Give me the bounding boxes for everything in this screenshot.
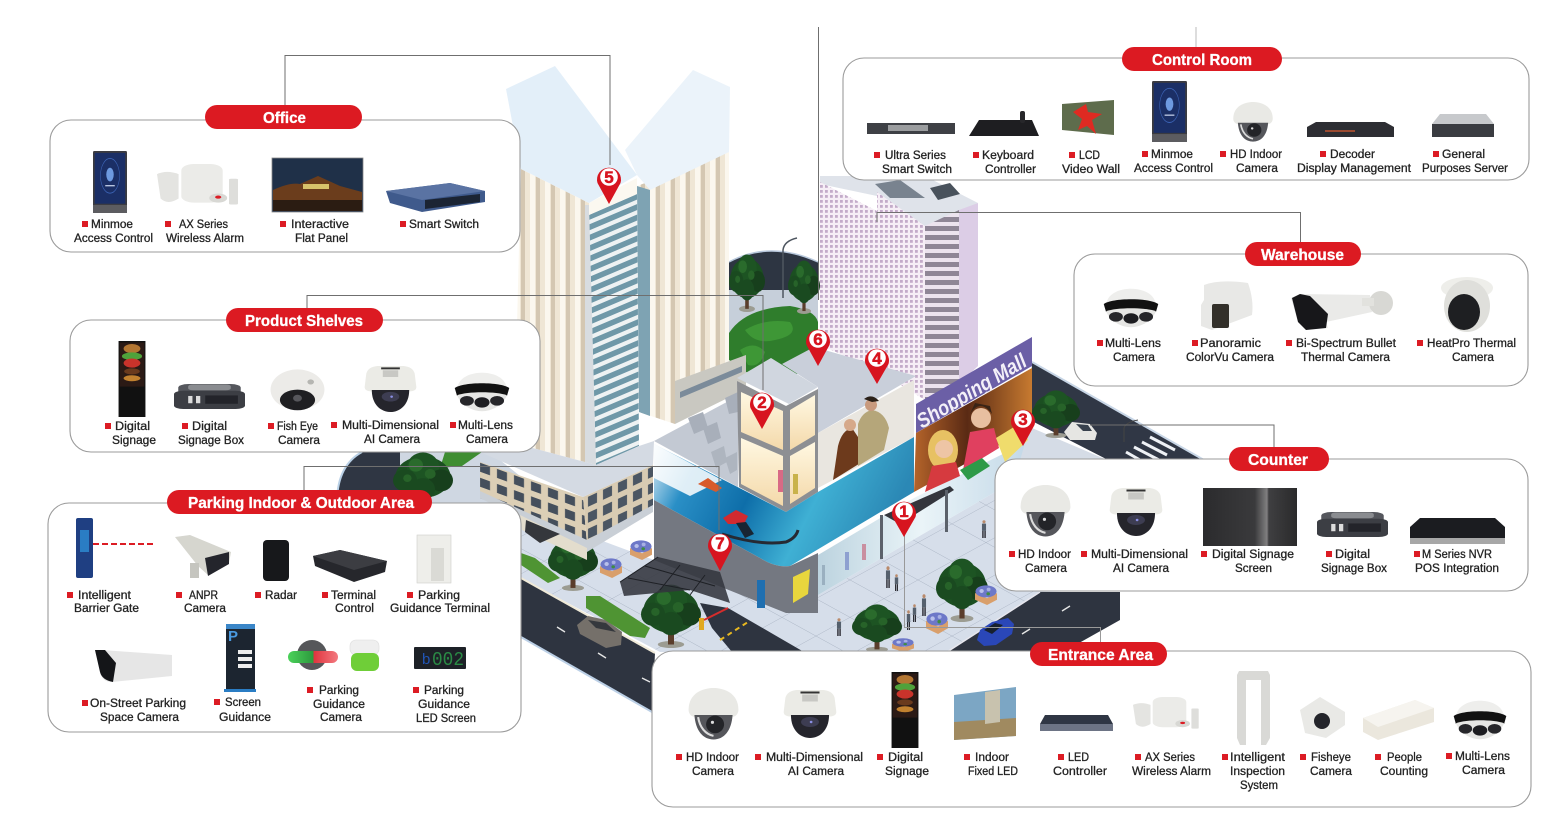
item: minmoe access control [1134,81,1213,175]
item: keyboard controller [969,111,1039,176]
item: parking guidance led screen: LED Screen [416,711,476,725]
item: fish eye camera: Fish Eye [277,419,318,433]
heading: warehouse: Warehouse [1261,247,1344,264]
item: m series nvr pos integration: M Series NVR [1422,547,1492,561]
item: fisheye camera [1300,697,1352,778]
panel: warehouse [1074,242,1528,386]
item: people counting [1363,700,1434,778]
item: fish eye camera: Camera [278,433,320,447]
item: radar [255,540,297,602]
couple billboard [818,380,914,488]
left road block behind panels [337,452,525,512]
item: heatpro thermal camera [1417,277,1516,364]
right road with crosswalk [1000,362,1206,462]
isometric mall scene [337,66,1206,712]
panel: office [50,105,520,252]
item: m series nvr pos integration [1410,518,1505,575]
item: screen guidance: Screen [225,695,261,709]
item: multi-lens camera [1097,289,1161,364]
item: multi-dimensional ai camera [1081,488,1188,575]
item: heatpro thermal camera: HeatPro Thermal [1427,336,1516,350]
item: multi-dimensional ai camera [331,366,439,446]
item: minmoe access control: Access Control [74,231,153,245]
item: smart switch [386,183,485,231]
item: panoramic colorvu camera [1186,281,1274,364]
item: anpr camera: Camera [184,601,226,615]
pin 1 [892,502,916,537]
wraparound LED screen with skier [654,437,914,566]
item: keyboard controller: Keyboard [982,148,1034,162]
mall lower roof with rooftop units [654,392,738,487]
item: parking guidance led screen: Parking [424,683,464,697]
item: intelligent barrier gate: Barrier Gate [74,601,139,615]
item: decoder display management: Decoder [1330,147,1375,161]
item: ultra series smart switch [867,123,955,176]
panel: parking indoor and outdoor area [48,490,521,732]
item: digital signage screen [1201,488,1297,575]
item: fish eye camera [268,369,324,447]
item: screen guidance: Guidance [219,710,271,724]
heading: product shelves [226,308,383,332]
pin 2 [750,393,774,429]
item: panoramic colorvu camera: Panoramic [1200,336,1261,350]
item: keyboard controller: Controller [985,162,1036,176]
item: hd indoor camera: Camera [1025,561,1067,575]
item: parking guidance led screen: Guidance [418,697,470,711]
pin 6: 6 [813,330,823,349]
item: digital signage [105,341,156,447]
item: ax series wireless alarm: AX Series [1145,750,1195,764]
item: led controller: LED [1068,750,1089,764]
item: panoramic colorvu camera: ColorVu Camera [1186,350,1274,364]
item: hd indoor camera [1009,485,1071,575]
item: interactive flat panel: Flat Panel [295,231,348,245]
item: multi-lens camera: Multi-Lens [1105,336,1161,350]
pin 6 [806,330,830,366]
item: multi-dimensional ai camera: Multi-Dimensional [766,750,863,764]
item: general purposes server: Purposes Server [1422,161,1508,175]
heading: control room [1122,47,1282,71]
item: terminal control [313,550,387,615]
item: lcd video wall: LCD [1079,148,1100,162]
item: on-street parking space camera: Space Camera [100,710,179,724]
item: digital signage screen: Screen [1235,561,1272,575]
panel: control room [843,47,1529,180]
item: fisheye camera: Fisheye [1311,750,1351,764]
item: digital signage box: Digital [1335,547,1370,561]
item: parking guidance camera: Guidance [313,697,365,711]
item: digital signage box [1317,512,1388,575]
item: multi-lens camera [1446,701,1510,777]
item: parking guidance camera: Parking [319,683,359,697]
item: multi-lens camera [450,373,513,446]
item: anpr camera [175,535,231,615]
item: on-street parking space camera: On-Street Parking [90,696,186,710]
item: decoder display management [1297,122,1412,175]
item: digital signage: Signage [885,764,929,778]
heading: counter [1229,447,1329,471]
item: bi-spectrum bullet thermal camera: Thermal Camera [1301,350,1390,364]
item: intelligent barrier gate [67,518,155,615]
bottom streets [521,578,1120,712]
item: general purposes server [1422,114,1508,175]
item: minmoe access control: Minmoe [91,217,133,231]
item: multi-lens camera: Camera [1113,350,1155,364]
item: indoor fixed led: Fixed LED [968,764,1018,778]
heading: parking [167,490,432,514]
pin 7 [708,534,732,571]
item: digital signage: Digital [115,419,150,433]
item: minmoe access control: Access Control [1134,161,1213,175]
heading: product shelves: Product Shelves [245,313,363,330]
hedges and trees on plaza [521,520,997,652]
item: multi-dimensional ai camera: Multi-Dimensional [1091,547,1188,561]
right pink tower [820,176,978,402]
item: interactive flat panel [272,158,363,245]
item: intelligent inspection system: Intelligent [1230,750,1286,764]
item: bi-spectrum bullet thermal camera [1286,291,1397,364]
panel: entrance area [652,642,1531,807]
glass showroom cube [737,358,818,512]
item: smart switch: Smart Switch [409,217,479,231]
item: indoor fixed led: Indoor [975,750,1009,764]
item: intelligent inspection system [1222,671,1286,792]
heading: counter: Counter [1248,452,1308,469]
item: multi-dimensional ai camera: AI Camera [788,764,844,778]
item: intelligent inspection system: Inspection [1230,764,1285,778]
item: lcd video wall [1062,100,1120,176]
heading: control room: Control Room [1152,52,1252,69]
item: multi-lens camera: Camera [466,432,508,446]
item: multi-lens camera: Camera [1462,763,1505,777]
heading: warehouse [1245,242,1361,266]
item: interactive flat panel: Interactive [291,217,349,231]
left office tower [506,66,746,465]
item: intelligent barrier gate: Intelligent [78,588,132,602]
item: fisheye camera: Camera [1310,764,1352,778]
item: digital signage box: Signage Box [178,433,245,447]
connector lines [285,27,1300,642]
item: digital signage [877,672,929,778]
left annex building [480,441,654,560]
item: on-street parking space camera [82,650,186,724]
parking canopy entrance [620,557,730,630]
item: minmoe access control [74,151,153,245]
location pins [597,168,1035,571]
item: indoor fixed led [954,687,1018,778]
item: multi-lens camera: Multi-Lens [1455,749,1510,763]
item: digital signage: Digital [888,750,923,764]
item: multi-dimensional ai camera: Multi-Dimensional [342,418,439,432]
pin 4 [865,349,889,384]
item: screen guidance: P [228,628,238,645]
item: m series nvr pos integration: POS Integration [1415,561,1499,575]
item: multi-lens camera: Multi-Lens [458,418,513,432]
item: ax series wireless alarm: Wireless Alarm [1132,764,1211,778]
pin 2: 2 [757,393,767,412]
item: hd indoor camera: Camera [692,764,734,778]
item: parking guidance terminal: Parking [418,588,460,602]
item: multi-dimensional ai camera: AI Camera [364,432,420,446]
item: decoder display management: Display Management [1297,161,1412,175]
item: digital signage: Signage [112,433,156,447]
item: screen guidance [214,624,271,724]
item: ax series wireless alarm [1132,697,1211,778]
item: radar: Radar [265,588,297,602]
item: ultra series smart switch: Ultra Series [885,148,946,162]
item: lcd video wall: Video Wall [1062,162,1120,176]
item: parking guidance camera [288,640,379,724]
heading: entrance area: Entrance Area [1048,647,1153,664]
item: parking guidance led screen [413,647,476,725]
panel: counter [995,447,1528,591]
item: parking guidance terminal [390,535,490,615]
item: heatpro thermal camera: Camera [1452,350,1494,364]
plaza pavement [521,470,1130,652]
item: hd indoor camera: HD Indoor [686,750,739,764]
heading: entrance area [1030,642,1167,666]
item: hd indoor camera [1220,102,1282,175]
item: digital signage box [174,384,245,447]
item: anpr camera: ANPR [189,588,218,602]
heading: office: Office [263,110,306,127]
item: bi-spectrum bullet thermal camera: Bi-Spectrum Bullet [1296,336,1397,350]
item: multi-dimensional ai camera [755,690,863,778]
item: ax series wireless alarm: AX Series [179,217,228,231]
item: parking guidance led screen: b [422,651,430,668]
item: people counting: Counting [1380,764,1428,778]
item: people counting: People [1387,750,1422,764]
item: parking guidance led screen: 002 [432,649,464,671]
item: led controller [1040,715,1113,778]
item: ax series wireless alarm: Wireless Alarm [166,231,244,245]
item: parking guidance camera: Camera [320,710,362,724]
pin 3: 3 [1018,410,1028,429]
item: general purposes server: General [1442,147,1485,161]
item: terminal control: Terminal [331,588,376,602]
item: digital signage box: Signage Box [1321,561,1388,575]
pin 5: 5 [604,168,614,187]
pin 3 [1011,410,1035,446]
back road and lawn [729,238,820,384]
item: minmoe access control: Minmoe [1151,147,1193,161]
heading: parking: Parking Indoor & Outdoor Area [188,495,414,512]
item: parking guidance terminal: Guidance Terminal [390,601,490,615]
panel: product shelves [70,308,540,452]
shopping mall sign: Shopping Mall [913,349,1032,433]
item: terminal control: Control [335,601,374,615]
mall ground floor walls [654,443,1025,613]
pin 4: 4 [872,349,882,368]
pin 1: 1 [899,502,909,521]
item: led controller: Controller [1053,764,1107,778]
mall upper roof [782,347,916,433]
item: ultra series smart switch: Smart Switch [882,162,952,176]
heading: office [205,105,362,129]
item: ax series wireless alarm [157,164,244,245]
item: hd indoor camera: HD Indoor [1230,147,1282,161]
item: hd indoor camera: Camera [1236,161,1278,175]
item: hd indoor camera: HD Indoor [1018,547,1071,561]
shoppers billboard [914,368,1032,492]
pin 5 [597,168,621,204]
pin 7: 7 [715,534,725,553]
item: digital signage screen: Digital Signage [1212,547,1294,561]
item: multi-dimensional ai camera: AI Camera [1113,561,1169,575]
item: intelligent inspection system: System [1240,778,1278,792]
item: hd indoor camera [676,688,739,778]
item: digital signage box: Digital [192,419,227,433]
